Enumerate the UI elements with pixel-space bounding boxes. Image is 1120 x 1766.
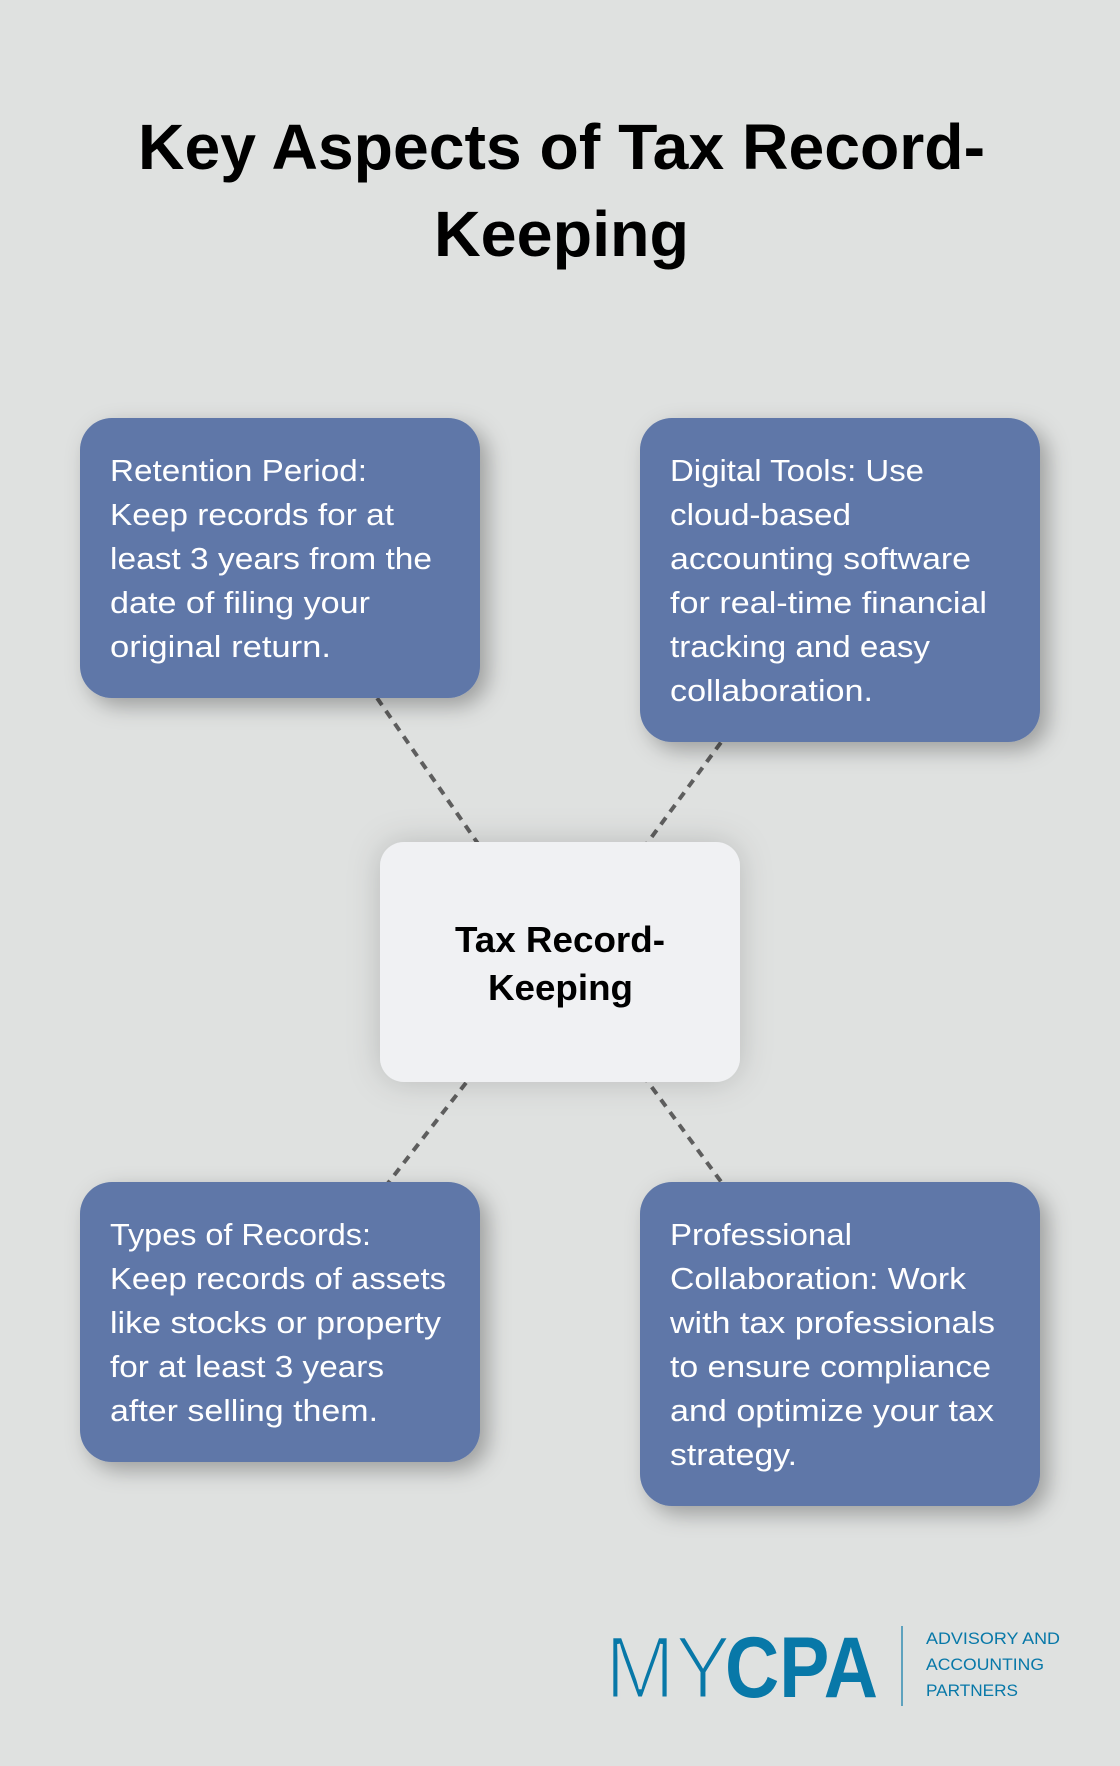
logo: ACCOUNTING bbox=[926, 1656, 1044, 1674]
panel: professional collaboration bbox=[640, 1182, 1040, 1506]
panel: professional collaboration: with tax professionals bbox=[669, 1305, 995, 1340]
connector: retention period to center bbox=[280, 558, 560, 962]
panel: retention period: Keep records for at bbox=[110, 497, 394, 532]
panel: professional collaboration: Collaboration: Work bbox=[670, 1261, 967, 1296]
panel: center topic: Tax Record- bbox=[455, 919, 665, 960]
panel: types of records: after selling them. bbox=[110, 1393, 378, 1428]
logo: ADVISORY AND bbox=[926, 1630, 1060, 1648]
panel: types of records: like stocks or property bbox=[110, 1305, 442, 1340]
panel: professional collaboration: strategy. bbox=[670, 1437, 797, 1472]
panel: retention period bbox=[80, 418, 480, 698]
panel: retention period: original return. bbox=[110, 629, 331, 664]
panel: digital tools: tracking and easy bbox=[670, 629, 931, 664]
panel: digital tools: accounting software bbox=[670, 541, 971, 576]
logo: CPA bbox=[725, 1620, 878, 1716]
panel: retention period: date of filing your bbox=[110, 585, 370, 620]
panel: digital tools: for real-time financial bbox=[670, 585, 987, 620]
panel: professional collaboration: to ensure compliance bbox=[670, 1349, 991, 1384]
panel: types of records bbox=[80, 1182, 480, 1462]
panel: retention period: Retention Period: bbox=[110, 453, 367, 488]
panel: digital tools: collaboration. bbox=[670, 673, 873, 708]
panel: types of records: Types of Records: bbox=[110, 1217, 371, 1252]
title: Keeping bbox=[434, 198, 689, 270]
panel: center topic bbox=[380, 842, 740, 1082]
connector: types of records to center bbox=[280, 962, 560, 1322]
panel: professional collaboration: Professional bbox=[670, 1217, 852, 1252]
panel: center topic: Keeping bbox=[488, 967, 633, 1008]
title bbox=[138, 111, 985, 270]
panel: digital tools: cloud-based bbox=[670, 497, 851, 532]
logo bbox=[605, 1617, 1060, 1717]
panel: digital tools: Digital Tools: Use bbox=[670, 453, 924, 488]
connector: digital tools to center bbox=[560, 580, 840, 962]
logo: PARTNERS bbox=[926, 1682, 1018, 1700]
logo: MY bbox=[605, 1617, 731, 1717]
panel: types of records: Keep records of assets bbox=[110, 1261, 446, 1296]
panel: types of records: for at least 3 years bbox=[110, 1349, 384, 1384]
panel: retention period: least 3 years from the bbox=[110, 541, 432, 576]
panel: professional collaboration: and optimize your tax bbox=[670, 1393, 995, 1428]
panel: digital tools bbox=[640, 418, 1040, 742]
connector: professional collaboration to center bbox=[560, 962, 840, 1344]
title: Key Aspects of Tax Record- bbox=[138, 111, 985, 183]
